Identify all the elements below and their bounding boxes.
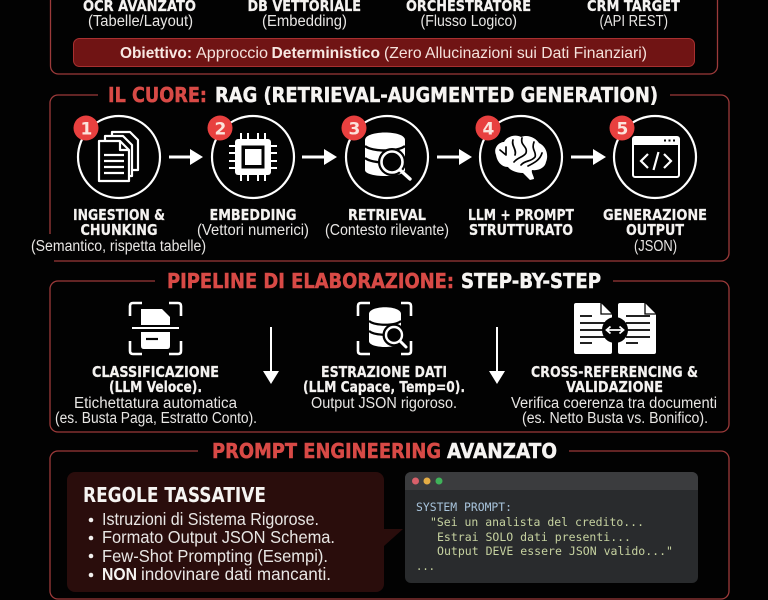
label: extraction: (LLM Capace, Temp=0). xyxy=(303,378,465,396)
label: retrieval xyxy=(325,206,449,239)
label: OCR: (Tabelle/Layout) xyxy=(88,13,193,30)
panel: prompt engineering xyxy=(50,439,729,599)
list: rules xyxy=(89,509,335,584)
label: orchestrator xyxy=(406,0,531,30)
list: rules: Formato Output JSON Schema. xyxy=(102,527,335,547)
badge: 1 xyxy=(74,116,98,140)
label: OCR xyxy=(83,0,196,30)
list: rules: NON xyxy=(102,564,137,584)
panel: pipeline xyxy=(50,269,729,432)
callout: objective: (Zero Allucinazioni sui Dati Finanziari) xyxy=(384,45,647,62)
arrow xyxy=(169,156,192,158)
step: extraction xyxy=(303,303,465,412)
label: classification: CLASSIFICAZIONE xyxy=(92,363,219,381)
arrowhead xyxy=(324,149,337,165)
label: cross-referencing xyxy=(511,363,717,427)
heading: RAG: IL CUORE: xyxy=(108,83,207,107)
panel: architecture stack xyxy=(50,0,718,74)
callout: objective xyxy=(74,38,694,66)
icon: code window xyxy=(633,137,679,177)
label: classification: (LLM Veloce). xyxy=(109,378,202,396)
label: classification xyxy=(55,363,257,427)
label: classification: (es. Busta Paga, Estratto Conto). xyxy=(55,410,257,427)
icon: chip xyxy=(229,133,277,181)
label: output: GENERAZIONE xyxy=(603,206,707,224)
arrowhead xyxy=(190,149,203,165)
code text: SYSTEM PROMPT: xyxy=(416,500,512,514)
heading: prompt engineering: AVANZATO xyxy=(447,439,557,463)
code text: ... xyxy=(416,559,435,573)
list: rules: Few-Shot Prompting (Esempi). xyxy=(102,546,328,566)
heading: rules: REGOLE TASSATIVE xyxy=(83,483,266,507)
list: rules: indovinare dati mancanti. xyxy=(141,564,331,584)
badge: 3: 3 xyxy=(348,120,360,140)
label: embedding: (Vettori numerici) xyxy=(197,222,309,239)
label: output xyxy=(603,206,707,255)
label: cross-referencing: CROSS-REFERENCING & xyxy=(531,363,698,381)
arrow xyxy=(302,156,326,158)
heading: pipeline: PIPELINE DI ELABORAZIONE: xyxy=(167,269,454,293)
icon: database search xyxy=(365,132,410,179)
label: classification: Etichettatura automatica xyxy=(74,395,237,412)
list: rules: Istruzioni di Sistema Rigorose. xyxy=(102,509,319,529)
step: cross-referencing xyxy=(511,303,717,427)
label: vector DB: (Embedding) xyxy=(262,13,347,30)
arrowhead xyxy=(593,149,606,165)
step 5: output xyxy=(603,116,707,255)
label: cross-referencing: Verifica coerenza tra documenti xyxy=(511,395,717,412)
label: ingestion: CHUNKING xyxy=(80,221,158,239)
callout: objective: Deterministico xyxy=(272,45,380,62)
code window xyxy=(405,472,698,583)
badge: 2: 2 xyxy=(214,120,226,140)
arrow: down xyxy=(270,327,272,373)
icon: documents xyxy=(99,132,138,181)
label: embedding xyxy=(197,206,309,239)
label: embedding: EMBEDDING xyxy=(210,206,296,224)
arrowhead xyxy=(459,149,472,165)
label: CRM xyxy=(587,0,680,30)
step: classification xyxy=(55,303,257,427)
label: LLM: LLM + PROMPT xyxy=(468,206,574,224)
code text xyxy=(416,500,673,573)
code text: Estrai SOLO dati presenti... xyxy=(437,530,631,544)
step 3: retrieval xyxy=(325,116,449,239)
label: cross-referencing: VALIDAZIONE xyxy=(566,378,663,396)
badge: 1: 1 xyxy=(80,120,92,140)
label: output: OUTPUT xyxy=(626,221,684,239)
heading: prompt engineering: PROMPT ENGINEERING xyxy=(212,439,441,463)
label: extraction: ESTRAZIONE DATI xyxy=(321,363,447,381)
badge: 4: 4 xyxy=(482,120,494,140)
label: ingestion: INGESTION & xyxy=(73,206,165,224)
step 1: ingestion xyxy=(31,116,206,255)
label: LLM xyxy=(468,206,574,239)
label: output: (JSON) xyxy=(634,238,677,255)
icon: scan database xyxy=(358,303,411,354)
window controls xyxy=(412,478,442,484)
step 2: embedding xyxy=(197,116,309,239)
label: vector DB xyxy=(248,0,361,30)
arrow xyxy=(437,156,461,158)
label: cross-referencing: (es. Netto Busta vs. Bonifico). xyxy=(522,410,708,427)
code text: Output DEVE essere JSON valido..." xyxy=(437,544,673,558)
label: LLM: STRUTTURATO xyxy=(469,221,573,239)
icon: scan document xyxy=(130,303,181,354)
code text: "Sei un analista del credito... xyxy=(430,515,644,529)
arrowhead xyxy=(489,371,505,384)
label: extraction xyxy=(303,363,465,412)
heading: pipeline: STEP-BY-STEP xyxy=(461,269,601,293)
label: retrieval: (Contesto rilevante) xyxy=(325,222,449,239)
heading: RAG: RAG (RETRIEVAL-AUGMENTED GENERATION) xyxy=(215,83,658,107)
label: CRM: (API REST) xyxy=(600,13,668,30)
callout: objective: Approccio xyxy=(196,45,268,62)
arrow xyxy=(571,156,595,158)
label: retrieval: RETRIEVAL xyxy=(348,206,426,224)
badge: 5: 5 xyxy=(616,120,628,140)
label: ingestion: (Semantico, rispetta tabelle) xyxy=(31,238,206,255)
step 4: LLM xyxy=(468,116,574,239)
callout: objective: Obiettivo: xyxy=(120,45,192,62)
label: ingestion xyxy=(31,206,206,255)
panel: RAG xyxy=(31,83,729,261)
arrow: down xyxy=(496,327,498,373)
icon: compare documents xyxy=(574,303,656,354)
label: orchestrator: (Flusso Logico) xyxy=(420,13,517,30)
label: extraction: Output JSON rigoroso. xyxy=(311,395,457,412)
arrowhead xyxy=(263,371,279,384)
card: rules xyxy=(67,472,403,592)
icon: brain xyxy=(495,136,547,180)
